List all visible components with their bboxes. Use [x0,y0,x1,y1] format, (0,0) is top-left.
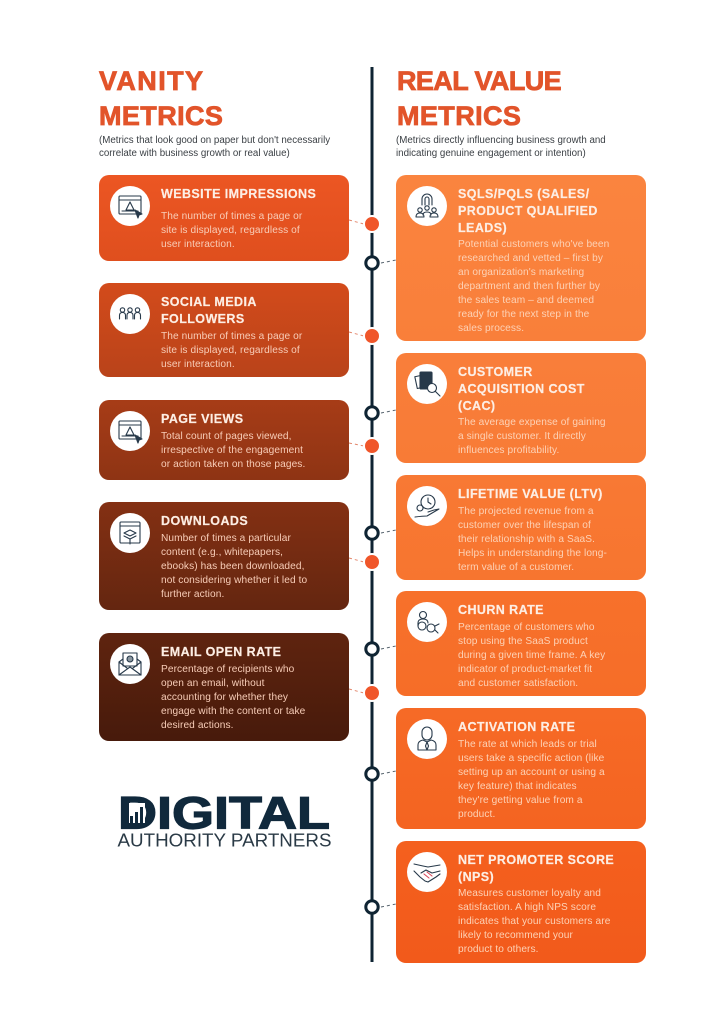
title: real value metrics [397,66,561,131]
heading: ACTIVATION RATE [458,720,575,734]
description: Measures customer loyalty and [458,888,601,898]
subtitle: vanity metrics: correlate with business growth or real value) [99,148,290,159]
description: satisfaction. A high NPS score [458,902,596,912]
description: stop using the SaaS product [458,636,588,646]
description: during a given time frame. A key [458,650,605,660]
description: customer over the lifespan of [458,520,591,530]
description: indicator of product-market fit [458,664,592,674]
icon: handshake [407,852,447,892]
description: engage with the content or take [161,706,305,716]
logo: digital authority partners [118,790,332,850]
description [458,738,605,820]
icon: open envelope [110,644,150,684]
description: or action taken on those pages. [161,458,305,470]
heading [458,364,585,413]
description: product to others. [458,944,539,954]
panel: SQLs/PQLs [396,175,646,341]
description: product. [458,808,495,820]
description: Potential customers who've been [458,238,609,250]
description: site is displayed, regardless of [161,344,300,356]
panel: website impressions [99,175,349,261]
description [161,210,302,250]
heading: LEADS) [458,220,507,234]
icon: browser cursor [110,411,150,451]
description: site is displayed, regardless of [161,224,300,236]
heading: (CAC) [458,398,496,412]
title: real value metrics: METRICS [397,101,521,131]
description [458,416,606,456]
description: The rate at which leads or trial [458,738,597,750]
description: indicates that your customers are [458,916,610,926]
description: key feature) that indicates [458,780,577,792]
description: irrespective of the engagement [161,444,303,456]
subtitle: vanity metrics [99,135,330,159]
description: and customer satisfaction. [458,678,578,688]
description: open an email, without [161,678,265,688]
description: desired actions. [161,720,234,730]
panel: page views [99,400,349,480]
heading: (NPS) [458,870,494,884]
description: influences profitability. [458,444,559,456]
description [161,532,307,600]
heading: SQLS/PQLS (SALES/ [458,186,589,200]
description: The number of times a page or [161,330,302,342]
description: ready for the next step in the [458,308,589,320]
icon: money and magnifier [407,364,447,404]
heading: DOWNLOADS [161,514,248,528]
panel: activation rate [396,708,646,829]
icon: magnet with people [407,186,447,226]
heading: ACQUISITION COST [458,382,585,396]
heading [458,186,598,235]
description: department and then further by [458,280,600,292]
title: vanity metrics: VANITY [99,66,204,96]
description: user interaction. [161,238,235,250]
heading: NET PROMOTER SCORE [458,852,614,866]
description: users take a specific action (like [458,752,604,764]
description: The number of times a page or [161,210,302,222]
description: Percentage of recipients who [161,664,294,674]
description: setting up an account or using a [458,766,605,778]
icon: clock and hand [407,486,447,526]
title: real value metrics: REAL VALUE [397,66,561,96]
subtitle: vanity metrics: (Metrics that look good on paper but don't necessarily [99,135,330,146]
description: The average expense of gaining [458,416,606,428]
title: vanity metrics: METRICS [99,101,223,131]
panel: email open rate [99,633,349,741]
description: Total count of pages viewed, [161,430,292,442]
description [458,238,609,334]
heading: SOCIAL MEDIA [161,294,257,308]
panel: net promoter score [396,841,646,963]
heading: EMAIL OPEN RATE [161,644,281,658]
description: accounting for whether they [161,692,288,702]
heading: CHURN RATE [458,602,544,616]
description: content (e.g., whitepapers, [161,546,283,558]
description: sales process. [458,322,524,334]
description: a single customer. It directly [458,430,586,442]
description: The projected revenue from a [458,506,594,516]
description: they're getting value from a [458,794,583,806]
icon: browser cursor [110,186,150,226]
heading: PAGE VIEWS [161,412,243,426]
heading: FOLLOWERS [161,312,245,326]
description [161,330,302,370]
panel: customer acquisition cost [396,353,646,463]
description: likely to recommend your [458,930,573,940]
panel: churn rate [396,591,646,696]
heading: WEBSITE IMPRESSIONS [161,186,316,200]
heading: PRODUCT QUALIFIED [458,204,598,218]
description [458,506,607,572]
description: user interaction. [161,358,235,370]
panel: social media followers [99,283,349,377]
heading [458,852,614,884]
description: not considering whether it led to [161,574,307,586]
description: Percentage of customers who [458,622,595,632]
heading [161,294,257,326]
description: ebooks) has been downloaded, [161,560,305,572]
icon: group of people [110,294,150,334]
description [161,664,305,730]
description: further action. [161,588,224,600]
description: Helps in understanding the long- [458,548,607,558]
description: researched and vetted – first by [458,252,603,264]
subtitle: real value metrics: indicating genuine engagement or intention) [396,148,586,159]
description: Number of times a particular [161,532,291,544]
heading: LIFETIME VALUE (LTV) [458,486,603,500]
icon: people leaving [407,602,447,642]
description: the sales team – and deemed [458,294,594,306]
description: term value of a customer. [458,562,574,572]
panel: lifetime value [396,475,646,580]
title: vanity metrics [98,66,223,131]
description: their relationship with a SaaS. [458,534,595,544]
description [458,888,610,954]
subtitle: real value metrics [396,135,606,159]
logo: digital authority partners: AUTHORITY PARTNERS [118,830,332,850]
subtitle: real value metrics: (Metrics directly influencing business growth and [396,135,606,146]
panel: downloads [99,502,349,610]
icon: download box [110,513,150,553]
description: an organization's marketing [458,266,584,278]
description [161,430,305,470]
icon: person with tie [407,719,447,759]
description [458,622,606,688]
heading: CUSTOMER [458,364,533,378]
